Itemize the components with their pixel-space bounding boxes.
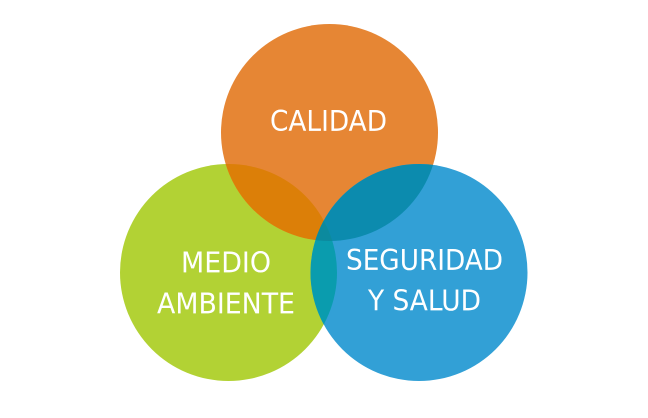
label: medio ambiente: AMBIENTE xyxy=(157,288,295,320)
label: seguridad y salud xyxy=(346,244,503,318)
overlap: calidad and medio ambiente xyxy=(226,164,324,240)
venn diagram xyxy=(120,24,528,381)
circle: seguridad y salud xyxy=(310,164,528,381)
circle: medio ambiente xyxy=(120,164,337,381)
label: seguridad y salud: SEGURIDAD xyxy=(346,244,503,277)
overlap: medio ambiente and seguridad xyxy=(310,220,337,324)
overlap: calidad and seguridad xyxy=(316,164,433,241)
label: calidad: CALIDAD xyxy=(270,105,387,138)
overlap: all three circles xyxy=(316,220,332,241)
label: medio ambiente xyxy=(157,246,295,320)
label: medio ambiente: MEDIO xyxy=(181,246,271,280)
label: seguridad y salud: Y SALUD xyxy=(367,284,481,318)
circle: calidad xyxy=(221,24,438,241)
